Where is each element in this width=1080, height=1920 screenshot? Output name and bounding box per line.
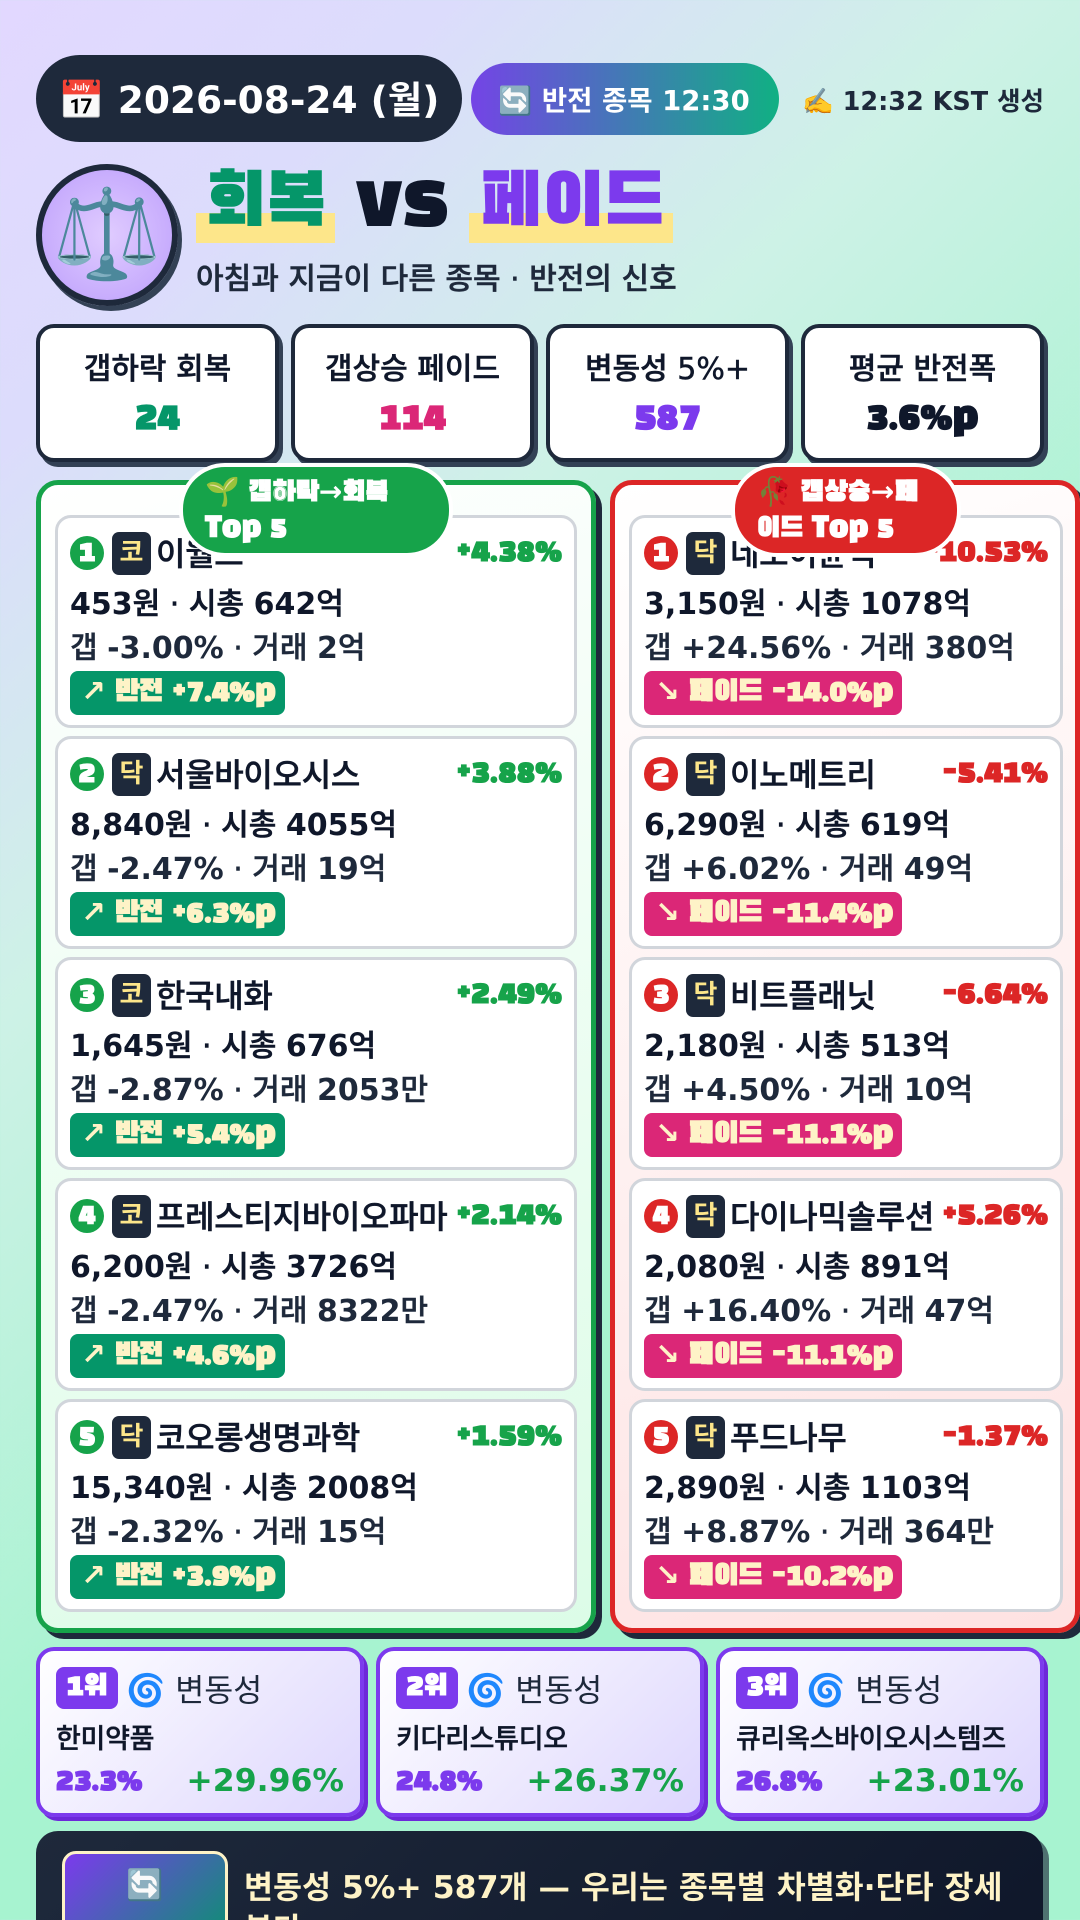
card: recovery 2: ↗ 반전 +6.3%p <box>81 900 276 929</box>
card: fade 5: 푸드나무 <box>730 1419 847 1457</box>
card: recovery 2: +3.88% <box>456 758 562 789</box>
card: fade 2: 2 <box>653 760 669 788</box>
card: fade 1 <box>629 515 1063 728</box>
card: recovery 3: 3 <box>79 981 95 1009</box>
title highlight: fade <box>469 213 673 243</box>
volatility card 1: 1위 <box>66 1673 108 1702</box>
tag: recovery top 5: 🌱 갭하락→회복 <box>205 479 389 507</box>
bottom banner <box>36 1831 1043 1920</box>
card: recovery 5 <box>55 1399 577 1612</box>
title highlight: recovery <box>196 213 335 243</box>
card: fade 4: 갭 +16.40% · 거래 47억 <box>644 1294 994 1329</box>
volatility card 2: +26.37% <box>526 1763 684 1799</box>
card: recovery 5: 15,340원 · 시총 2008억 <box>70 1471 418 1506</box>
date pill <box>36 55 462 142</box>
tag: fade top 5: 이드 Top 5 <box>757 515 894 543</box>
card: recovery 2: 닥 <box>120 759 143 789</box>
volatility card 3: 3위 <box>746 1673 788 1702</box>
tag: fade top 5: 🥀 갭상승→페 <box>757 479 918 507</box>
volatility card 2: 🌀 변동성 <box>466 1673 602 1709</box>
tag: fade top 5 <box>731 463 961 557</box>
volatility card 3: 큐리옥스바이오시스템즈 <box>736 1724 1006 1755</box>
card: recovery 5: +1.59% <box>456 1421 562 1452</box>
card: fade 2: 닥 <box>694 759 717 789</box>
stat: volatility <box>546 324 789 462</box>
volatility card 3 <box>716 1647 1044 1817</box>
card: recovery 3: +2.49% <box>456 979 562 1010</box>
card: fade 3: 비트플래닛 <box>730 977 876 1015</box>
card: recovery 1: 코 <box>120 538 143 568</box>
reversal time pill: 🔄 반전 종목 12:30 <box>498 85 750 117</box>
title word: recovery: 회복 <box>205 168 328 242</box>
stat: gap up fade: 114 <box>379 400 446 437</box>
volatility card 3: 26.8% <box>736 1768 822 1797</box>
subtitle: 아침과 지금이 다른 종목 · 반전의 신호 <box>196 262 677 297</box>
volatility card 2: 24.8% <box>396 1768 482 1797</box>
card: recovery 3 <box>55 957 577 1170</box>
volatility card 1 <box>36 1647 364 1817</box>
stat: gap down recovery: 24 <box>135 400 180 437</box>
card: recovery 4: ↗ 반전 +4.6%p <box>81 1342 276 1371</box>
card: recovery 4: 코 <box>120 1201 143 1231</box>
stat: gap up fade: 갭상승 페이드 <box>325 352 500 387</box>
stat: volatility: 변동성 5%+ <box>585 352 750 387</box>
card: fade 2: 이노메트리 <box>730 756 876 794</box>
card: recovery 2: 서울바이오시스 <box>156 756 360 794</box>
stat: average reversal: 평균 반전폭 <box>849 352 996 387</box>
card: recovery 1 <box>55 515 577 728</box>
card: recovery 1: 1 <box>79 539 95 567</box>
volatility card 1: 23.3% <box>56 1768 142 1797</box>
card: recovery 4: 프레스티지바이오파마 <box>156 1198 447 1236</box>
card: recovery 5: 5 <box>79 1423 95 1451</box>
title <box>196 168 673 243</box>
card: recovery 5: ↗ 반전 +3.9%p <box>81 1563 276 1592</box>
icon: reversal arrows: 🔄 <box>126 1868 164 1903</box>
card: fade 3: -6.64% <box>942 979 1048 1010</box>
card: fade 5: -1.37% <box>942 1421 1048 1452</box>
card: recovery 2 <box>55 736 577 949</box>
card: recovery 5: 코오롱생명과학 <box>156 1419 360 1457</box>
volatility card 2 <box>376 1647 704 1817</box>
card: fade 4 <box>629 1178 1063 1391</box>
card: fade 1: 1 <box>653 539 669 567</box>
volatility card 2: 키다리스튜디오 <box>396 1724 568 1755</box>
tag: recovery top 5 <box>179 463 453 557</box>
card: fade 2 <box>629 736 1063 949</box>
card: fade 5: 5 <box>653 1423 669 1451</box>
card: fade 3 <box>629 957 1063 1170</box>
card: recovery 1: +4.38% <box>456 537 562 568</box>
tag: recovery top 5: Top 5 <box>205 515 287 543</box>
card: fade 5: 갭 +8.87% · 거래 364만 <box>644 1515 994 1550</box>
banner message: 변동성 5%+ 587개 — 우리는 종목별 차별화·단타 장세 <box>244 1870 1003 1906</box>
card: recovery 3: 한국내화 <box>156 977 273 1015</box>
stat: average reversal <box>801 324 1044 462</box>
card: recovery 3: 1,645원 · 시총 676억 <box>70 1029 376 1064</box>
card: recovery 4: +2.14% <box>456 1200 562 1231</box>
stat: average reversal: 3.6%p <box>866 400 979 437</box>
card: fade 5: ↘ 페이드 -10.2%p <box>655 1563 894 1592</box>
title word: fade: 페이드 <box>479 168 666 242</box>
card: fade 3: 2,180원 · 시총 513억 <box>644 1029 950 1064</box>
panel: recovery <box>36 480 596 1633</box>
card: fade 4: 2,080원 · 시총 891억 <box>644 1250 950 1285</box>
card: fade 3: 닥 <box>694 980 717 1010</box>
card: recovery 3: 갭 -2.87% · 거래 2053만 <box>70 1073 428 1108</box>
card: fade 3: 갭 +4.50% · 거래 10억 <box>644 1073 973 1108</box>
card: fade 3: 3 <box>653 981 669 1009</box>
card: fade 2: ↘ 페이드 -11.4%p <box>655 900 894 929</box>
card: recovery 2: 2 <box>79 760 95 788</box>
card: recovery 4: 갭 -2.47% · 거래 8322만 <box>70 1294 428 1329</box>
volatility card 3: 🌀 변동성 <box>806 1673 942 1709</box>
card: recovery 5: 닥 <box>120 1422 143 1452</box>
stat: gap down recovery: 갭하락 회복 <box>84 352 231 387</box>
volatility card 2: 2위 <box>406 1673 448 1702</box>
card: fade 4: +5.26% <box>942 1200 1048 1231</box>
panel: fade <box>610 480 1080 1633</box>
card: fade 1: ↘ 페이드 -14.0%p <box>655 679 894 708</box>
card: fade 5: 닥 <box>694 1422 717 1452</box>
card: fade 1: -10.53% <box>924 537 1048 568</box>
card: fade 3: ↘ 페이드 -11.1%p <box>655 1121 894 1150</box>
volatility card 1: 한미약품 <box>56 1724 154 1755</box>
card: fade 4: 닥 <box>694 1201 717 1231</box>
card: recovery 3: ↗ 반전 +5.4%p <box>81 1121 276 1150</box>
stat: volatility: 587 <box>634 400 701 437</box>
card: fade 5: 2,890원 · 시총 1103억 <box>644 1471 971 1506</box>
card: fade 1: 갭 +24.56% · 거래 380억 <box>644 631 1015 666</box>
card: fade 1: 네오이뮨텍 <box>730 535 876 573</box>
card: recovery 4 <box>55 1178 577 1391</box>
card: recovery 2: 갭 -2.47% · 거래 19억 <box>70 852 386 887</box>
card: fade 2: 갭 +6.02% · 거래 49억 <box>644 852 973 887</box>
icon: balance scale: ⚖️ <box>52 182 162 285</box>
reversal time pill <box>471 63 779 135</box>
card: recovery 2: 8,840원 · 시총 4055억 <box>70 808 397 843</box>
card: fade 4: ↘ 페이드 -11.1%p <box>655 1342 894 1371</box>
card: fade 2: -5.41% <box>942 758 1048 789</box>
volatility card 1: 🌀 변동성 <box>126 1673 262 1709</box>
card: recovery 4: 4 <box>79 1202 95 1230</box>
card: recovery 1: ↗ 반전 +7.4%p <box>81 679 276 708</box>
icon: balance scale <box>36 164 178 306</box>
card: recovery 5: 갭 -2.32% · 거래 15억 <box>70 1515 386 1550</box>
card: recovery 3: 코 <box>120 980 143 1010</box>
stat: gap down recovery <box>36 324 279 462</box>
card: recovery 1: 이월드 <box>156 535 243 573</box>
volatility card 3: +23.01% <box>866 1763 1024 1799</box>
card: fade 1: 3,150원 · 시총 1078억 <box>644 587 971 622</box>
title word: vs: vs <box>356 168 449 242</box>
generated time: ✍️ 12:32 KST 생성 <box>802 87 1044 117</box>
card: fade 4: 4 <box>653 1202 669 1230</box>
stat: gap up fade <box>291 324 534 462</box>
card: fade 4: 다이나믹솔루션 <box>730 1198 934 1236</box>
card: fade 2: 6,290원 · 시총 619억 <box>644 808 950 843</box>
date pill: 📅 2026-08-24 (월) <box>58 78 439 122</box>
card: fade 1: 닥 <box>694 538 717 568</box>
card: recovery 1: 갭 -3.00% · 거래 2억 <box>70 631 366 666</box>
card: recovery 1: 453원 · 시총 642억 <box>70 587 344 622</box>
volatility card 1: +29.96% <box>186 1763 344 1799</box>
card: fade 5 <box>629 1399 1063 1612</box>
card: recovery 4: 6,200원 · 시총 3726억 <box>70 1250 397 1285</box>
banner badge <box>62 1851 228 1920</box>
